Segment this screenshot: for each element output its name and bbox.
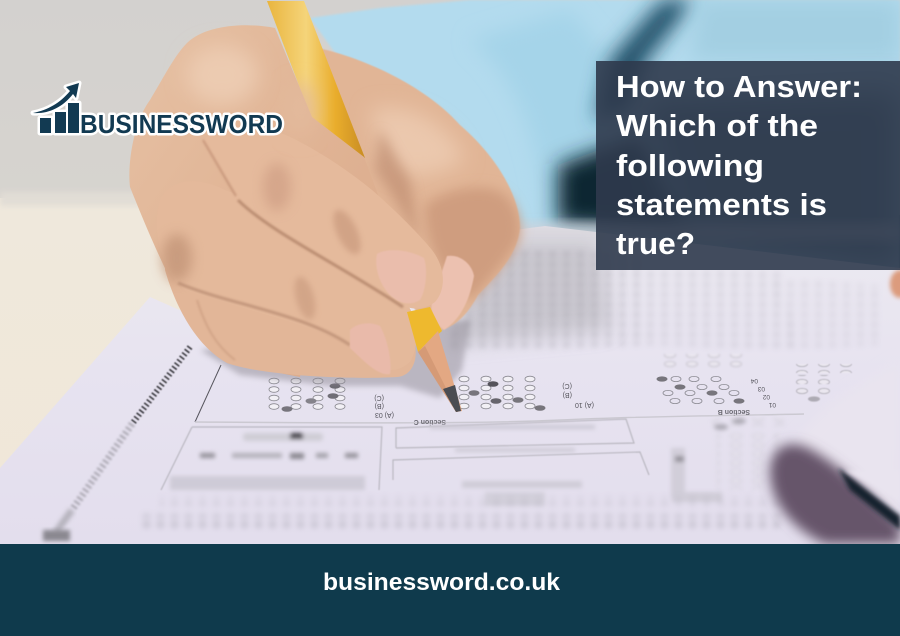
lower form boxes <box>161 419 649 490</box>
sleeve: blue shirt <box>310 0 900 290</box>
sheet form lines <box>195 365 804 423</box>
answer bubbles: section B <box>655 354 776 415</box>
title text: How to Answer: <box>616 70 862 104</box>
footer band <box>0 544 900 636</box>
lower finger <box>165 235 416 378</box>
hand <box>129 25 443 378</box>
answer bubbles: section C: Section C <box>414 418 446 425</box>
middle finger <box>157 181 417 370</box>
small skin patch at right edge <box>890 270 900 298</box>
knuckle and crease shading <box>162 234 192 282</box>
logo: Businessword <box>33 83 283 139</box>
index nail <box>376 250 426 303</box>
palm and knuckles <box>129 25 380 377</box>
right section bubble stack <box>712 418 784 490</box>
answer bubbles: section D <box>454 375 594 411</box>
answer bubbles: section D: (A) 10 <box>575 401 594 408</box>
knuckle highlights <box>186 45 258 105</box>
answer bubbles: section B: 04 <box>750 377 758 384</box>
answer bubbles: section C: (B) <box>375 402 384 409</box>
thumb nail <box>432 256 474 330</box>
middle nail <box>350 323 391 374</box>
answer bubbles: section B: 02 <box>762 393 770 400</box>
blurred bubble columns on the far sheet <box>450 235 610 345</box>
answer bubbles: section C <box>264 377 446 425</box>
title text: Which of the <box>616 109 818 143</box>
title text <box>616 70 862 261</box>
answer bubbles: section B: 01 <box>768 401 776 408</box>
logo wordmark: BUSINESSWORD <box>80 109 283 139</box>
bottom blurred bubble rows <box>140 496 780 528</box>
footer url: businessword.co.uk <box>323 569 561 596</box>
answer bubbles: section D: (B) <box>563 391 572 398</box>
title text: statements is <box>616 188 827 222</box>
timing marks along sheet edge <box>43 347 190 541</box>
pencil lower and tip <box>407 307 462 412</box>
answer bubbles: section B: 03 <box>757 385 765 392</box>
pencil upper <box>267 1 365 158</box>
answer sheet paper <box>0 224 900 544</box>
turned page corner, blurred foreground <box>770 360 900 544</box>
lower form blurred content <box>170 425 722 506</box>
answer bubbles: section C: (C) <box>374 394 384 401</box>
hand shadow on sheet <box>200 320 470 398</box>
title text: following <box>616 149 764 183</box>
title panel <box>596 61 900 270</box>
hand back and thumb behind pencil <box>300 45 520 332</box>
answer bubbles: section D: (C) <box>562 382 572 389</box>
answer bubbles: section C: (A) 03 <box>375 411 394 418</box>
answer bubbles: far right column <box>792 364 858 402</box>
logo icon: bars and arrow <box>33 83 79 133</box>
title text: true? <box>616 227 695 261</box>
answer bubbles: section B: Section B <box>718 408 750 415</box>
index finger <box>203 126 443 308</box>
